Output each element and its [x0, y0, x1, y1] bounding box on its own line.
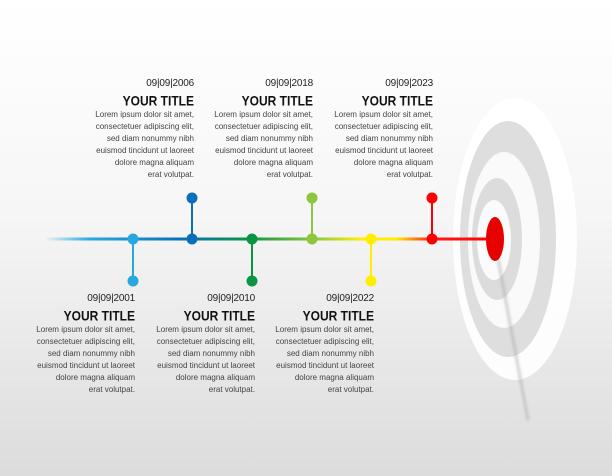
text: 2018: 09|09|2018 [265, 78, 313, 89]
text: 2001: erat volutpat. [89, 385, 135, 394]
text: 2006: YOUR TITLE [123, 93, 194, 109]
text: 2022: YOUR TITLE [303, 308, 374, 324]
text: 2010: YOUR TITLE [184, 308, 255, 324]
text: 2023: 09|09|2023 [385, 78, 433, 89]
text: 2022: erat volutpat. [328, 385, 374, 394]
text: 2001: 09|09|2001 [87, 293, 135, 304]
text: 2023: YOUR TITLE [362, 93, 433, 109]
text: 2022: dolore magna aliquam [295, 373, 374, 382]
text: 2006: erat volutpat. [148, 170, 194, 179]
text: 2006 [95, 78, 194, 179]
text: 2010: euismod tincidunt ut laoreet [157, 361, 255, 370]
text: 2006: consectetuer adipiscing elit, [96, 122, 194, 131]
text: 2018: consectetuer adipiscing elit, [215, 122, 313, 131]
text: 2018: erat volutpat. [267, 170, 313, 179]
text: 2006: euismod tincidunt ut laoreet [96, 146, 194, 155]
text: 2018: sed diam nonummy nibh [226, 134, 313, 143]
text: 2001: consectetuer adipiscing elit, [37, 337, 135, 346]
node 2001 [128, 234, 138, 286]
text: 2010: dolore magna aliquam [176, 373, 255, 382]
text: 2022: consectetuer adipiscing elit, [276, 337, 374, 346]
text: 2010: sed diam nonummy nibh [168, 349, 255, 358]
text: 2023: sed diam nonummy nibh [346, 134, 433, 143]
text: 2006: 09|09|2006 [146, 78, 194, 89]
text: 2001: sed diam nonummy nibh [48, 349, 135, 358]
node 2022 [366, 234, 376, 286]
text: 2023: euismod tincidunt ut laoreet [335, 146, 433, 155]
text: 2018: euismod tincidunt ut laoreet [215, 146, 313, 155]
text: 2022: 09|09|2022 [326, 293, 374, 304]
text: 2022: sed diam nonummy nibh [287, 349, 374, 358]
node 2018 [307, 193, 317, 244]
text: 2001 [36, 293, 135, 394]
text: 2001: Lorem ipsum dolor sit amet, [36, 325, 135, 334]
text: 2018: Lorem ipsum dolor sit amet, [214, 110, 313, 119]
text: 2006: dolore magna aliquam [115, 158, 194, 167]
node 2023 [427, 193, 437, 244]
text: 2023 [334, 78, 433, 179]
text: 2010: consectetuer adipiscing elit, [157, 337, 255, 346]
timeline line [45, 238, 492, 240]
text: 2023: dolore magna aliquam [354, 158, 433, 167]
text: 2006: sed diam nonummy nibh [107, 134, 194, 143]
target [453, 98, 577, 420]
text: 2018: YOUR TITLE [242, 93, 313, 109]
text: 2001: euismod tincidunt ut laoreet [37, 361, 135, 370]
bullseye [486, 217, 504, 261]
text: 2010: erat volutpat. [209, 385, 255, 394]
text: 2018 [214, 78, 313, 179]
text: 2001: YOUR TITLE [64, 308, 135, 324]
text: 2022: Lorem ipsum dolor sit amet, [275, 325, 374, 334]
text: 2023: consectetuer adipiscing elit, [335, 122, 433, 131]
text: 2018: dolore magna aliquam [234, 158, 313, 167]
text: 2023: erat volutpat. [387, 170, 433, 179]
text: 2022: euismod tincidunt ut laoreet [276, 361, 374, 370]
text: 2001: dolore magna aliquam [56, 373, 135, 382]
text: 2022 [275, 293, 374, 394]
node 2010 [247, 234, 257, 286]
text: 2010: 09|09|2010 [207, 293, 255, 304]
text: 2006: Lorem ipsum dolor sit amet, [95, 110, 194, 119]
text: 2010: Lorem ipsum dolor sit amet, [156, 325, 255, 334]
text: 2023: Lorem ipsum dolor sit amet, [334, 110, 433, 119]
node 2006 [187, 193, 197, 244]
text: 2010 [156, 293, 255, 394]
